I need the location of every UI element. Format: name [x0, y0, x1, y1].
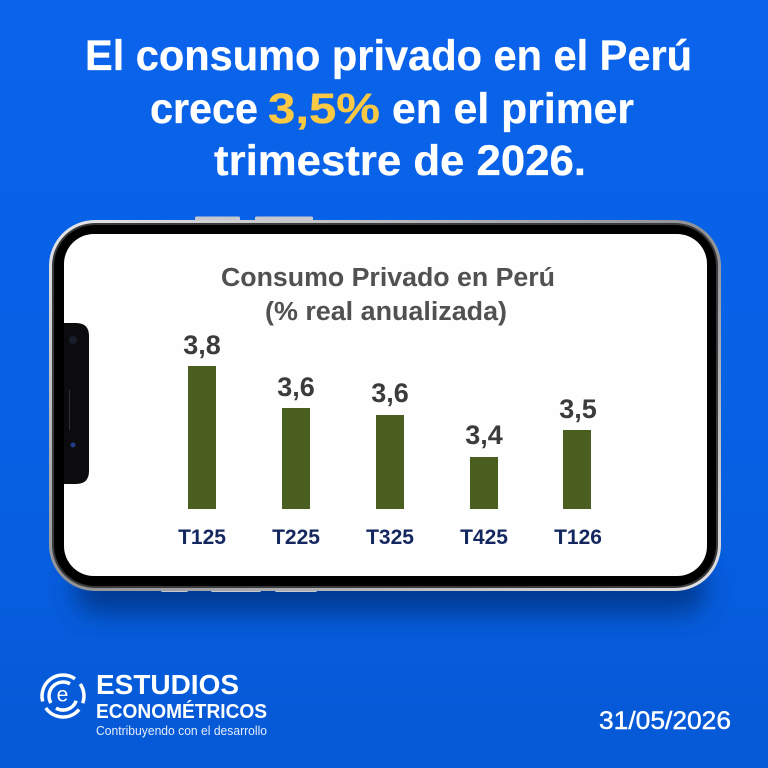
- phone screen: [64, 234, 707, 576]
- bar T425: 3,4: [465, 420, 503, 450]
- bar T125: 3,8: [183, 330, 221, 360]
- camera notch: [64, 323, 89, 484]
- bar T325: 3,6: [371, 378, 409, 408]
- title: 3,5%: [268, 85, 380, 133]
- icon: logo mark: e: [57, 684, 68, 706]
- bar T225: [272, 372, 320, 549]
- logo: ECONOMÉTRICOS: [96, 700, 267, 723]
- bar T125: [178, 330, 226, 549]
- phone frame: [49, 220, 721, 591]
- phone buttons: [161, 216, 317, 592]
- bar T126: [554, 394, 602, 549]
- chart title: Consumo Privado en Perú: [221, 264, 555, 292]
- icon: logo mark: [42, 675, 84, 717]
- logo: [42, 669, 267, 738]
- bar T325: [366, 378, 414, 549]
- bar T325: T325: [366, 526, 414, 549]
- bar chart: [178, 330, 602, 549]
- bar T125: T125: [178, 526, 226, 549]
- bar T126: T126: [554, 526, 602, 549]
- bar T425: T425: [460, 526, 508, 549]
- title: trimestre de 2026.: [214, 137, 586, 185]
- chart title: [221, 264, 555, 326]
- bar T225: 3,6: [277, 372, 315, 402]
- brand name: ESTUDIOS: [96, 669, 239, 700]
- title: El consumo privado en el Perú: [85, 32, 692, 80]
- tagline: Contribuyendo con el desarrollo: [96, 724, 267, 738]
- bar T425: [460, 420, 508, 549]
- phone: [49, 216, 721, 613]
- chart title: (% real anualizada): [265, 298, 507, 326]
- date: 31/05/2026: [599, 707, 731, 735]
- bar T126: 3,5: [559, 394, 597, 424]
- title: [85, 32, 692, 185]
- title: crece: [150, 85, 258, 133]
- bar T225: T225: [272, 526, 320, 549]
- title: en el primer: [392, 85, 634, 133]
